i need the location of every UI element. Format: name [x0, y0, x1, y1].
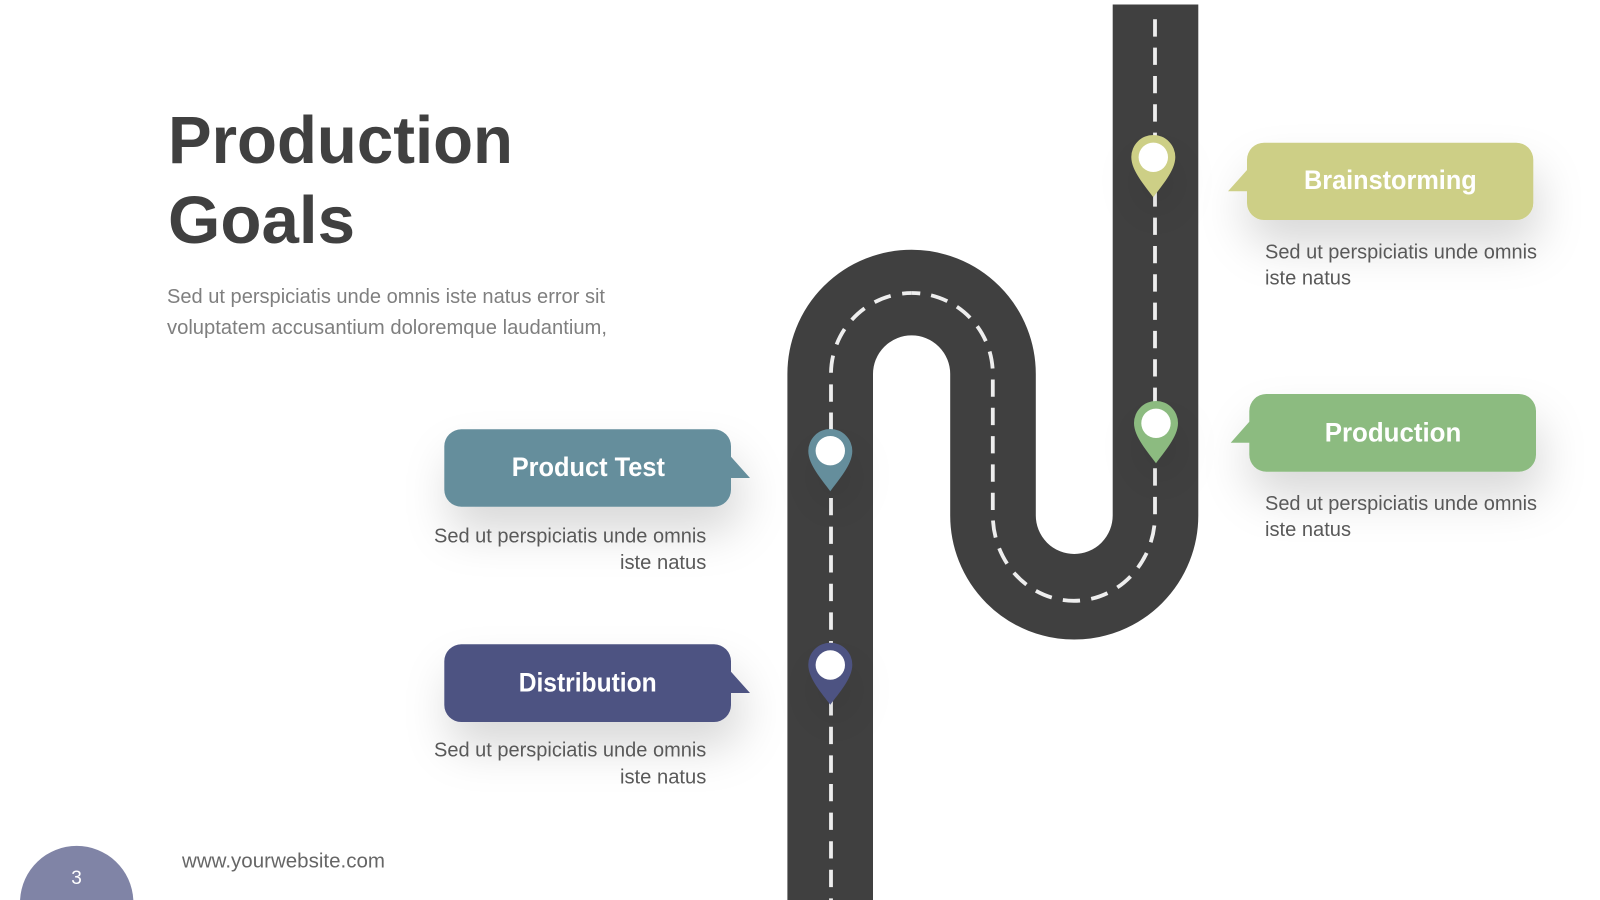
- description: iste natus: [1265, 267, 1351, 289]
- description: [1265, 493, 1537, 541]
- dashed centre line: [831, 19, 1155, 900]
- description: Sed ut perspiciatis unde omnis: [1265, 241, 1537, 263]
- heading: Production: [1325, 418, 1461, 448]
- description: [434, 526, 706, 574]
- description: [434, 740, 706, 788]
- callout: Brainstorming: [1228, 143, 1537, 289]
- description: [1265, 241, 1537, 289]
- heading: Product Test: [512, 452, 665, 482]
- title: [168, 103, 513, 258]
- callout: Distribution: [434, 644, 750, 788]
- description: iste natus: [620, 766, 706, 788]
- page number badge: [20, 846, 133, 900]
- description: Sed ut perspiciatis unde omnis: [434, 526, 706, 548]
- speech bubble: [444, 429, 750, 507]
- map pin: Production: [1134, 401, 1178, 463]
- map pin: Distribution: [808, 643, 852, 705]
- intro paragraph: Sed ut perspiciatis unde omnis iste natus error sit: [167, 286, 605, 308]
- heading: Distribution: [519, 668, 657, 698]
- page number badge: 3: [71, 868, 82, 889]
- speech bubble: [1231, 394, 1536, 472]
- description: iste natus: [620, 552, 706, 574]
- callout: Product Test: [434, 429, 750, 574]
- title: Production: [168, 103, 513, 178]
- speech bubble: [1228, 143, 1533, 220]
- title: Goals: [168, 183, 355, 258]
- description: Sed ut perspiciatis unde omnis: [434, 740, 706, 762]
- road surface: [830, 4, 1156, 900]
- description: Sed ut perspiciatis unde omnis: [1265, 493, 1537, 515]
- map pin: Brainstorming: [1131, 135, 1175, 197]
- intro paragraph: [167, 286, 607, 339]
- callout: Production: [1231, 394, 1537, 541]
- website url: www.yourwebsite.com: [181, 851, 385, 873]
- winding road: [830, 4, 1156, 900]
- speech bubble: [444, 644, 750, 722]
- intro paragraph: voluptatem accusantium doloremque laudantium,: [167, 317, 607, 339]
- map pin: Product Test: [808, 429, 852, 491]
- heading: Brainstorming: [1304, 165, 1477, 195]
- description: iste natus: [1265, 519, 1351, 541]
